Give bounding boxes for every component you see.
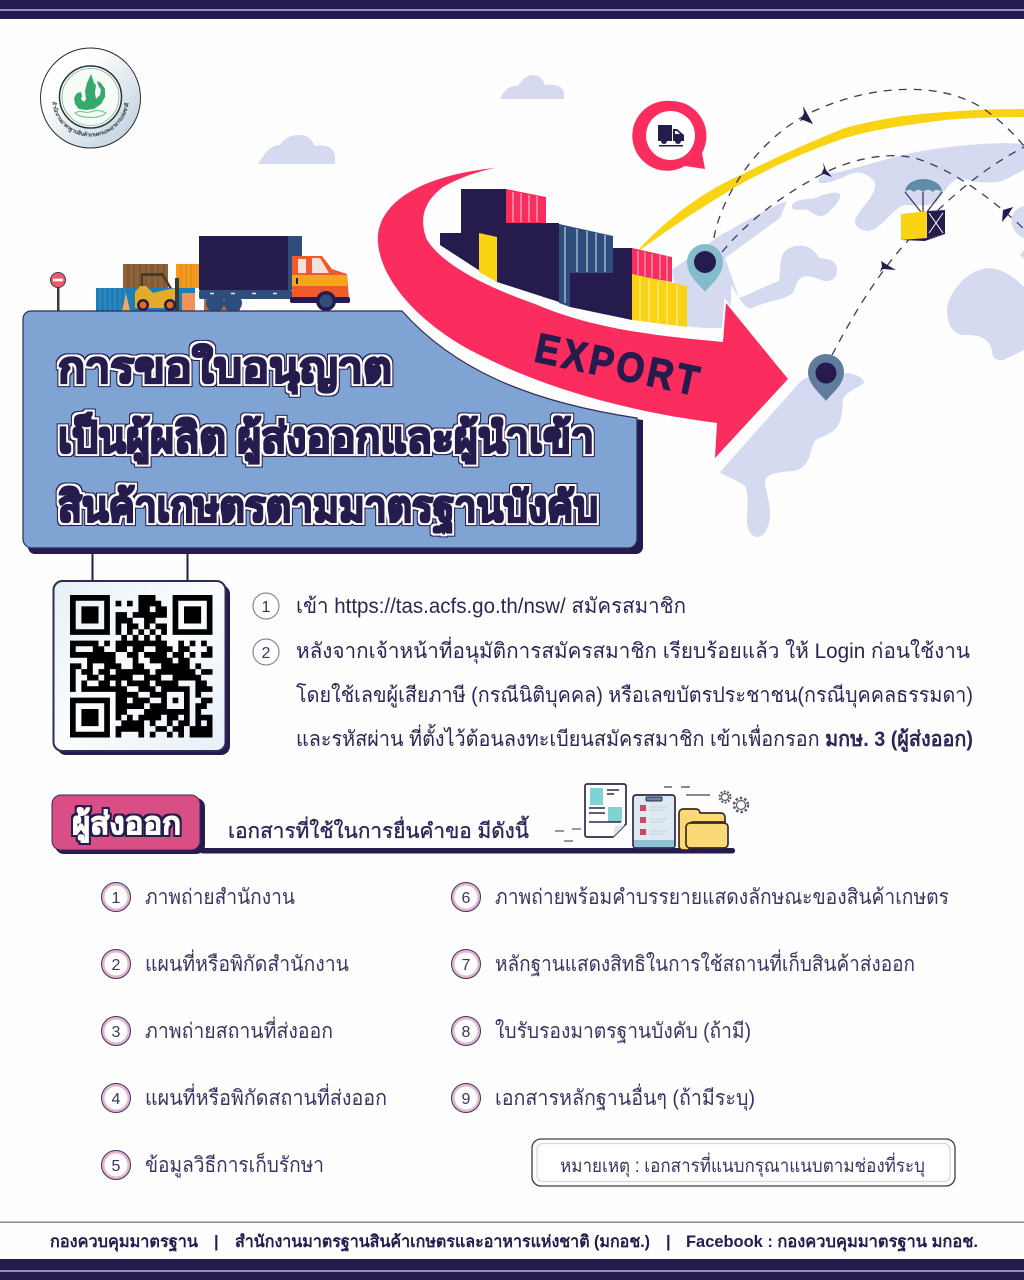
item 5: ข้อมูลวิธีการเก็บรักษา: [145, 1151, 324, 1178]
item 4: 4: [112, 1091, 121, 1108]
item 9: [452, 1083, 755, 1112]
title text: [58, 343, 598, 534]
icon: clipboard: [633, 795, 675, 848]
item 7: [452, 949, 915, 978]
item 1: 1: [112, 890, 121, 907]
title text: เป็นผู้ผลิต ผู้ส่งออกและผู้นำเข้า: [58, 412, 594, 464]
item 1: [102, 882, 295, 912]
cargo yard: [96, 264, 240, 311]
title text: สินค้าเกษตรตามมาตรฐานบังคับ: [58, 483, 598, 534]
item 5: [102, 1150, 324, 1180]
QR modules: [70, 595, 212, 738]
item 8: ใบรับรองมาตรฐานบังคับ (ถ้ามี): [495, 1019, 751, 1043]
top band: [0, 0, 1024, 19]
item 7: 7: [462, 957, 471, 974]
parachute cargo: [901, 179, 945, 241]
flight routes: [714, 89, 1024, 355]
title text: การขอใบอนุญาต: [58, 343, 392, 394]
document icons: [555, 784, 748, 850]
item 1: ภาพถ่ายสำนักงาน: [145, 886, 295, 909]
plane right: [1002, 207, 1013, 222]
export label: EXPORT: [531, 326, 703, 405]
icon: gears: [720, 792, 748, 812]
footer text: |: [214, 1233, 219, 1251]
item 4: [102, 1083, 387, 1112]
item 4: แผนที่หรือพิกัดสถานที่ส่งออก: [145, 1083, 387, 1110]
containers: [440, 189, 687, 327]
item 3: [102, 1016, 333, 1046]
item 2: [102, 949, 349, 978]
icon: truck: [658, 125, 684, 146]
footer text: Facebook : กองควบคุมมาตรฐาน มกอช.: [686, 1233, 978, 1252]
cloud right: [500, 75, 564, 99]
world map: [672, 143, 1024, 537]
map pin: destination: [808, 354, 844, 401]
delivery truck: [199, 236, 350, 312]
instructions: หลังจากเจ้าหน้าที่อนุมัติการสมัครสมาชิก เรียบร้อยแล้ว ให้ Login ก่อนใช้งาน: [296, 636, 970, 664]
export arrow: [378, 168, 788, 458]
plane top: [800, 106, 813, 124]
icon: document: [585, 784, 626, 837]
documents list: left column: [102, 882, 387, 1180]
item 9: 9: [462, 1091, 471, 1108]
truck location bubble: [632, 101, 706, 171]
bottom band: [0, 1259, 1024, 1280]
step 2 marker: 2: [262, 645, 271, 662]
section header: [52, 795, 735, 854]
instructions: โดยใช้เลขผู้เสียภาษี (กรณีนิติบุคคล) หรือเลขบัตรประชาชน(กรณีบุคคลธรรมดา): [296, 683, 973, 708]
item 9: เอกสารหลักฐานอื่นๆ (ถ้ามีระบุ): [495, 1083, 755, 1111]
logo: สำนักงานมาตรฐานสินค้าเกษตรและอาหารแห่งชาติ: [52, 102, 129, 137]
badge label: ผู้ส่งออก: [72, 806, 181, 843]
QR code card: [54, 581, 230, 755]
icon: folder: [679, 809, 728, 850]
item 7: หลักฐานแสดงสิทธิในการใช้สถานที่เก็บสินค้าส่งออก: [495, 949, 915, 976]
item 3: 3: [112, 1024, 121, 1041]
logo: [40, 48, 141, 148]
note box: หมายเหตุ : เอกสารที่แนบกรุณาแนบตามช่องที่ระบุ: [560, 1152, 925, 1178]
footer text: สำนักงานมาตรฐานสินค้าเกษตรและอาหารแห่งชาติ (มกอช.): [235, 1232, 650, 1252]
stop sign: [50, 272, 66, 311]
instructions: และรหัสผ่าน ที่ตั้งไว้ต้อนลงทะเบียนสมัครสมาชิก เข้าเพื่อกรอก มกษ. 3 (ผู้ส่งออก): [296, 724, 973, 753]
item 3: ภาพถ่ายสถานที่ส่งออก: [145, 1016, 333, 1043]
item 6: [452, 882, 949, 912]
note box: [532, 1139, 955, 1186]
QR hanger lines: [92, 554, 188, 581]
instructions: [253, 593, 973, 753]
yellow arc: [640, 109, 1024, 250]
footer text: |: [666, 1233, 671, 1251]
footer rule: [0, 1222, 1024, 1223]
item 2: แผนที่หรือพิกัดสำนักงาน: [145, 949, 349, 976]
item 2: 2: [112, 957, 121, 974]
section subtitle: เอกสารที่ใช้ในการยื่นคำขอ มีดังนี้: [228, 816, 529, 843]
plane lower: [880, 261, 896, 272]
instructions: เข้า https://tas.acfs.go.th/nsw/ สมัครสมาชิก: [296, 595, 686, 618]
forklift: [135, 273, 179, 311]
item 8: 8: [462, 1024, 471, 1041]
plane middle: [821, 162, 832, 177]
cloud left: [258, 135, 335, 164]
footer text: [50, 1232, 978, 1252]
item 8: [452, 1016, 751, 1046]
item 6: ภาพถ่ายพร้อมคำบรรยายแสดงลักษณะของสินค้าเกษตร: [495, 886, 949, 909]
item 6: 6: [462, 890, 471, 907]
footer text: กองควบคุมมาตรฐาน: [50, 1233, 199, 1252]
step 1 marker: 1: [262, 599, 271, 616]
title panel: [23, 311, 643, 554]
step 2 marker: [253, 639, 279, 665]
step 1 marker: [253, 593, 279, 619]
documents list: right column: [452, 882, 949, 1112]
item 5: 5: [112, 1158, 121, 1175]
map pin: origin: [687, 244, 723, 292]
